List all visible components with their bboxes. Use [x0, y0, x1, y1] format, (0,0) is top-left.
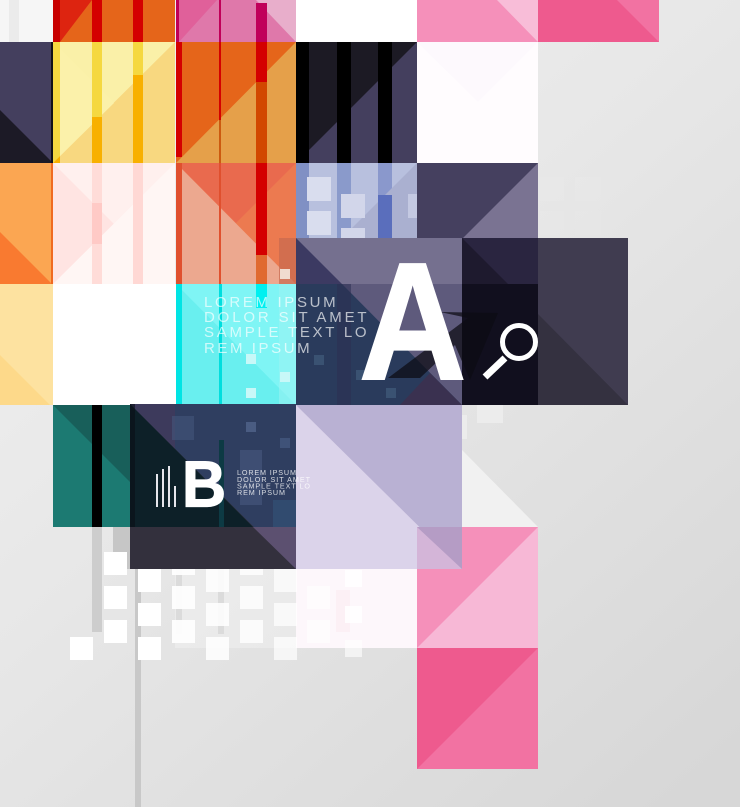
faint ghost squares — [540, 177, 601, 235]
panel: teal tile — [53, 405, 175, 527]
lorem text B: DOLOR SIT AMET — [237, 475, 311, 484]
panel: lavender tile — [296, 405, 462, 569]
letter A: A — [359, 229, 466, 415]
lorem text B: REM IPSUM — [237, 488, 286, 497]
lorem text B — [237, 468, 311, 497]
lorem text A — [204, 294, 369, 357]
lorem text A: DOLOR SIT AMET — [204, 309, 369, 326]
lorem text B: SAMPLE TEXT LO — [237, 482, 311, 490]
panel: third row tiles — [0, 163, 538, 284]
arrow shadow behind letter A — [388, 312, 498, 380]
lorem text A: REM IPSUM — [204, 340, 312, 357]
panel: B tile — [130, 404, 296, 569]
letter B: B — [182, 449, 226, 521]
panel: pink tiles — [417, 527, 538, 769]
panel: A tile — [296, 238, 628, 405]
panel: fourth row left tiles — [0, 284, 296, 405]
lorem text B: LOREM IPSUM — [237, 468, 297, 477]
panel: second row tiles — [0, 42, 538, 163]
lorem text A: LOREM IPSUM — [204, 294, 338, 311]
white squares pattern — [70, 552, 362, 660]
panel: top row tiles — [0, 0, 659, 42]
icon: magnifier — [485, 326, 536, 377]
icon: bars — [156, 466, 176, 507]
lorem text A: SAMPLE TEXT LO — [204, 324, 369, 341]
light triangle tile — [462, 405, 538, 527]
grey vertical stripes and bottom panels — [92, 527, 417, 807]
